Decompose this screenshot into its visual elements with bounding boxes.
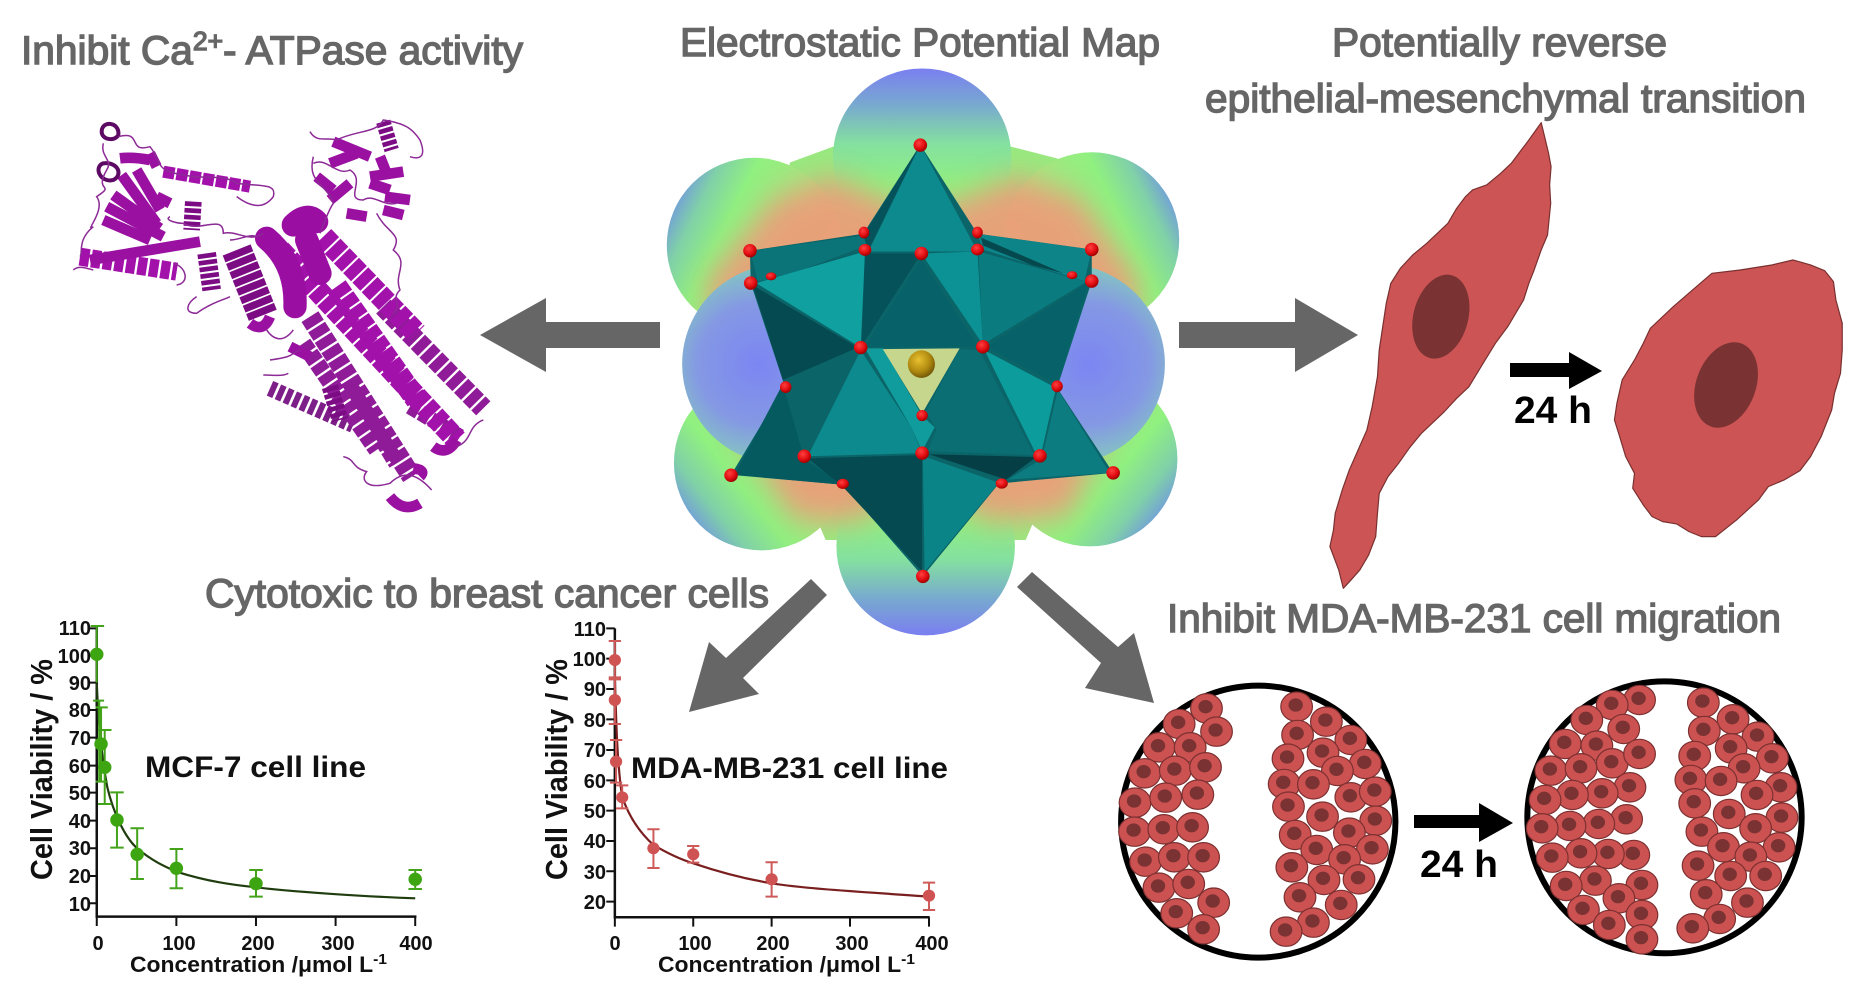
MCF-7 label: MCF-7 cell line (145, 751, 366, 784)
MCF-7 y tick labels: 40 (69, 811, 91, 833)
MDA-MB-231 y tick labels: 20 (584, 892, 606, 914)
MDA-MB-231 y tick labels: 80 (584, 710, 606, 732)
title: Potentially reverse EMT (1205, 21, 1806, 121)
MCF-7 y tick labels: 80 (69, 700, 91, 722)
MDA-MB-231 axes and data (606, 628, 935, 927)
title: Potentially reverse EMT: Potentially reverse (1332, 21, 1667, 65)
MDA-MB-231 y tick labels: 110 (574, 619, 606, 641)
title: Potentially reverse EMT: epithelial-mesenchymal transition (1205, 77, 1806, 121)
title: Electrostatic Potential Map: Electrostatic Potential Map (680, 21, 1160, 65)
scratch assay: after (1526, 681, 1802, 954)
MDA-MB-231 x tick labels: 0 (609, 933, 621, 955)
MCF-7 y tick labels: 110 (59, 618, 91, 640)
MDA-MB-231 x tick labels (609, 933, 949, 955)
MCF-7 x tick labels: 100 (162, 933, 196, 955)
arrow: down-left to charts (689, 579, 827, 712)
MCF-7 y tick labels: 60 (69, 756, 91, 778)
chart: MDA-MB-231 cell viability (539, 619, 949, 977)
MDA-MB-231 y tick labels: 90 (584, 679, 606, 701)
MCF-7 x tick labels: 400 (399, 933, 433, 955)
MDA-MB-231 x tick labels: 100 (678, 933, 712, 955)
scratch assay: before (1119, 686, 1395, 958)
MCF-7 y tick labels: 70 (69, 728, 91, 750)
MCF-7 x tick labels: 200 (241, 933, 275, 955)
MDA-MB-231 y tick labels: 40 (584, 831, 606, 853)
arrow: left to protein (480, 298, 660, 372)
elongated mesenchymal cell (1330, 123, 1551, 588)
MDA-MB-231 y tick labels: 60 (584, 771, 606, 793)
cell pair: epithelial-mesenchymal transition (1330, 123, 1842, 588)
arrow: right to cells (1179, 298, 1358, 372)
MCF-7 y tick labels: 50 (69, 783, 91, 805)
MDA-MB-231 x tick labels: 200 (756, 933, 790, 955)
MCF-7 y tick labels (58, 618, 91, 916)
MCF-7 y tick labels: 10 (69, 894, 91, 916)
MCF-7 y axis title: Cell Viability / % (24, 659, 59, 880)
MDA-MB-231 y tick labels: 70 (584, 740, 606, 762)
protein ribbon: Ca2+ ATPase (73, 120, 483, 507)
MCF-7 y tick labels: 100 (58, 646, 91, 668)
title: Cytotoxic to breast cancer cells: Cytotoxic to breast cancer cells (205, 572, 769, 616)
title: Inhibit Ca2+ ATPase activity: Inhibit Ca (21, 29, 190, 73)
label: 24 h migration: 24 h (1420, 844, 1498, 886)
MDA-MB-231 y tick labels (573, 619, 606, 914)
MDA-MB-231 x axis title: Concentration /μmol L (658, 952, 891, 977)
molecule: electrostatic potential map (667, 68, 1179, 635)
arrow: down-right to migration (1017, 572, 1154, 703)
MDA-MB-231 y tick labels: 30 (584, 862, 606, 884)
MCF-7 y tick labels: 20 (69, 866, 91, 888)
label: 24 h EMT: 24 h (1514, 390, 1592, 432)
MCF-7 y tick labels: 30 (69, 838, 91, 860)
title: Inhibit MDA-MB-231 cell migration: Inhibit MDA-MB-231 cell migration (1167, 597, 1781, 641)
polyhedra cage (724, 138, 1120, 583)
MDA-MB-231 y tick labels: 100 (573, 649, 606, 671)
MCF-7 x axis title: Concentration /μmol L (130, 952, 363, 977)
MDA-MB-231 x tick labels: 400 (915, 933, 949, 955)
MCF-7 y tick labels: 90 (69, 673, 91, 695)
chart: MCF-7 cell viability (24, 618, 433, 977)
title: Inhibit Ca2+ ATPase activity: - ATPase activity (223, 29, 523, 73)
MDA-MB-231 y tick labels: 50 (584, 801, 606, 823)
rounded epithelial cell (1614, 260, 1842, 537)
MDA-MB-231 y axis title: Cell Viability / % (539, 659, 574, 880)
MCF-7 x tick labels (92, 933, 433, 955)
arrow: 24 h EMT (1510, 352, 1602, 389)
MDA-MB-231 label: MDA-MB-231 cell line (631, 752, 948, 785)
MDA-MB-231 x tick labels: 300 (835, 933, 869, 955)
central gold atom (908, 350, 935, 378)
arrow: 24 h migration (1414, 803, 1513, 842)
MCF-7 axes and data (90, 626, 422, 926)
MDA-MB-231 x axis title: -1 (901, 951, 915, 968)
MCF-7 x tick labels: 0 (92, 933, 104, 955)
MCF-7 x axis title: -1 (373, 951, 387, 968)
potential surface lobes (667, 68, 1179, 635)
MCF-7 x tick labels: 300 (321, 933, 355, 955)
title: Inhibit Ca2+ ATPase activity: 2+ (193, 26, 223, 56)
